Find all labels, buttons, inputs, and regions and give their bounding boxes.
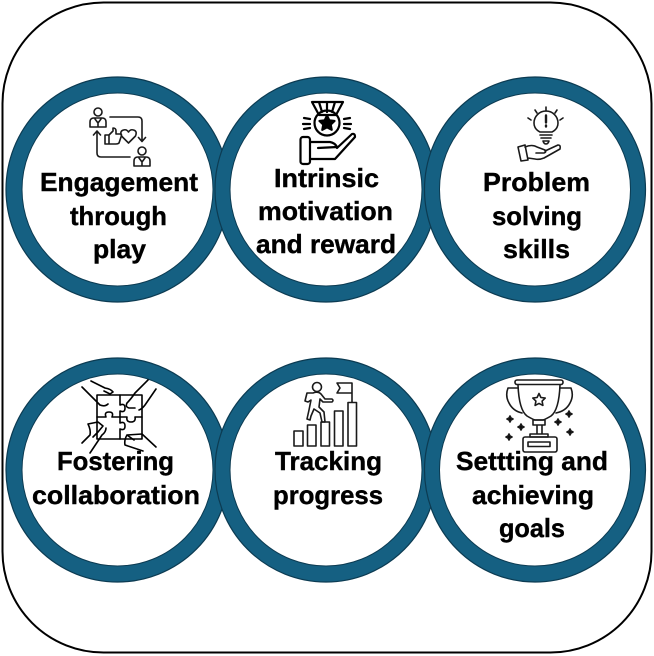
inner disc: goals [440, 374, 630, 566]
icon: trophy with stars [506, 380, 573, 452]
ring: fostering [6, 358, 229, 582]
label: Setting and achieving goals: achieving [472, 480, 594, 510]
ring: tracking progress [215, 358, 437, 582]
label: Setting and achieving goals: goals [499, 513, 565, 543]
label: Intrinsic motivation and reward: and reward [256, 229, 396, 259]
label: Tracking progress [273, 446, 383, 510]
inner disc: problem [440, 93, 630, 286]
icon: climbing bars with flag [294, 382, 356, 446]
label: Problem solving skills: solving [492, 201, 582, 231]
label: Tracking progress: Tracking [275, 446, 382, 476]
label: Problem solving skills [483, 167, 590, 264]
ring: engagement [6, 77, 229, 302]
label: Fostering collaboration: Fostering [57, 446, 174, 476]
label: Intrinsic motivation and reward [256, 163, 396, 259]
label: Engagement through play: through [70, 201, 167, 231]
ring: intrinsic motivation [215, 77, 437, 302]
label: Intrinsic motivation and reward: Intrinsic [274, 163, 379, 193]
ring: problem solving [424, 77, 646, 302]
icon: medal in hand [300, 102, 355, 164]
label: Tracking progress: progress [273, 480, 383, 510]
label: Problem solving skills: Problem [483, 167, 590, 197]
label: Fostering collaboration [32, 446, 200, 510]
icon: hands joining puzzle [82, 380, 156, 453]
inner disc: fostering [22, 374, 213, 566]
label: Intrinsic motivation and reward: motivation [258, 196, 393, 226]
inner disc: engagement [22, 93, 213, 286]
icon: people with like and heart [90, 108, 150, 166]
label: Problem solving skills: skills [503, 234, 570, 264]
inner disc: tracking [230, 374, 422, 566]
label: Fostering collaboration: collaboration [32, 480, 200, 510]
label: Setting and achieving goals [456, 446, 608, 543]
inner disc: intrinsic [230, 93, 422, 286]
ring: setting goals [424, 358, 646, 582]
label: Engagement through play: play [93, 234, 147, 264]
label: Engagement through play: Engagement [40, 167, 198, 197]
label: Engagement through play [40, 167, 198, 264]
label: Setting and achieving goals: Settting and [456, 446, 608, 476]
icon: light bulb over hand [518, 107, 563, 161]
